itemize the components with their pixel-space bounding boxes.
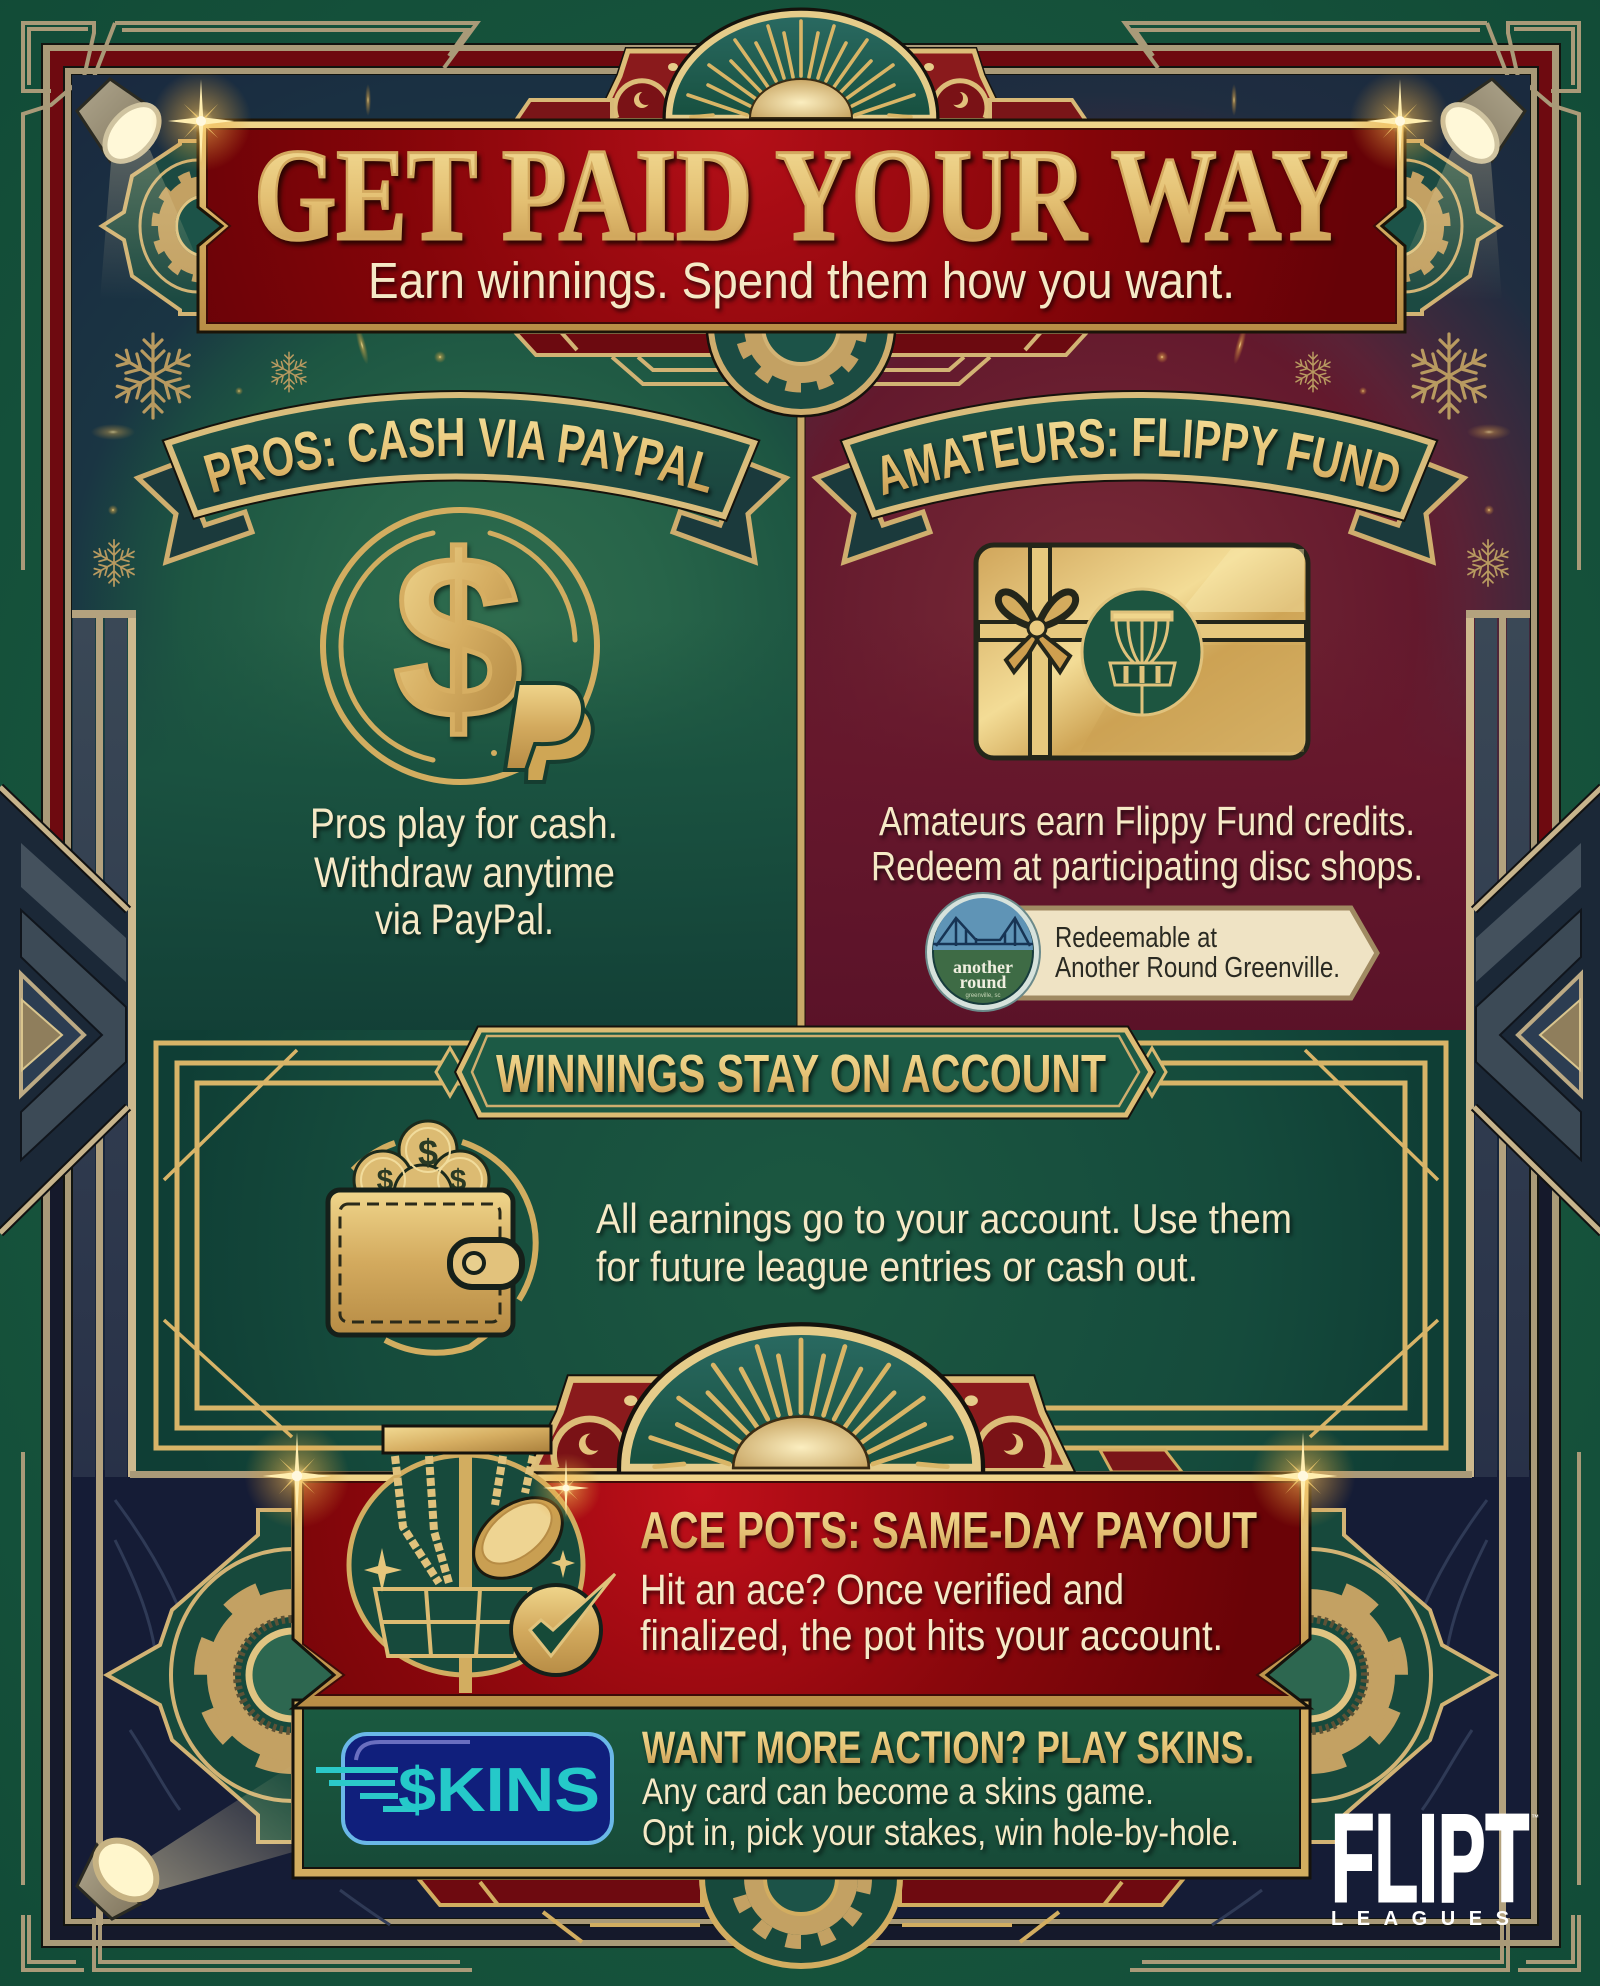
snowflake side [91,540,137,586]
panel: pros lower shading [136,620,801,1045]
panel: pros background [72,75,801,1045]
text: skins: WANT MORE ACTION? PLAY SKINS. [642,1722,1254,1773]
logo: skins: $KINS [398,1756,600,1825]
icon: ace basket [349,1426,615,1693]
spotlight beam lower [128,1760,300,1890]
title gear medallion [102,141,256,314]
panel: amateurs background [801,75,1530,1045]
top wing lines [515,100,1087,122]
sparkle ace mid [531,1453,601,1523]
text: ace pots: Hit an ace? Once verified and [640,1566,1124,1614]
text: winnings: for future league entries or cash out. [596,1243,1198,1290]
text: skins: Opt in, pick your stakes, win hole-by-hole. [642,1812,1239,1853]
text: skins: Any card can become a skins game. [642,1771,1154,1812]
side decoration right [800,0,1600,1925]
sparkle ace left [244,1424,350,1528]
icon: wallet [328,1121,536,1353]
snowflake small [269,352,309,392]
ribbon heading: amateurs: AMATEURS: FLIPPY FUND [882,418,1403,500]
center divider [797,405,805,1035]
another round badge: another [953,957,1013,977]
another round badge [926,893,1040,1011]
icon: dollar and PayPal: $ [393,508,523,767]
lower navy area [72,1470,1530,1918]
panel: amateurs lower shading [801,620,1466,1045]
top sunburst [600,12,1002,118]
text: amateurs [871,798,1423,889]
lower title chevrons [515,332,1087,384]
top half gear medallion [710,239,892,413]
ribbon heading: pros: PROS: CASH VIA PAYPAL [204,418,712,497]
text: pros [310,800,618,944]
subtitle: Earn winnings. Spend them how you want. [368,252,1235,309]
path for ribbon text [200,456,720,497]
ace gear medallion [107,1510,415,1842]
lower sunburst [534,1328,1068,1468]
logo: skins [316,1734,612,1843]
sparkle ace right [1250,1424,1356,1528]
title: GET PAID YOUR WAY [254,121,1348,268]
snowflake large [111,334,195,418]
panel: winnings background [130,1030,1472,1477]
text: ace pots [640,1502,1257,1660]
text: pros: via PayPal. [375,896,554,944]
ribbon: amateurs [816,395,1464,562]
sparkle top right [1350,71,1450,171]
ember glows [91,84,446,515]
another round badge: round [960,972,1006,992]
text: amateurs: Amateurs earn Flippy Fund credits. [879,798,1415,844]
icon: wallet: $ [377,1164,394,1197]
redeem tag [1000,908,1377,998]
sparkle top left [151,71,251,171]
icon: gift card [976,545,1308,758]
spotlight bottom [77,1829,168,1919]
lower bottom wings [418,1878,1184,1942]
side decoration left [0,0,802,1925]
icon: wallet: $ [418,1132,438,1173]
text: amateurs: Redeem at participating disc shops. [871,843,1423,889]
redeem tag: Redeemable at [1055,922,1217,954]
spotlight top [77,79,170,172]
winnings heading plate: WINNINGS STAY ON ACCOUNT [496,1044,1106,1104]
title banner [198,120,1405,332]
another round badge: greenville, sc [965,993,1001,999]
text: winnings: All earnings go to your account. Use them [596,1195,1292,1242]
text: pros: Withdraw anytime [314,849,615,897]
logo: flipt leagues: LEAGUES [1331,1908,1509,1930]
icon: wallet: $ [450,1164,467,1197]
panel: skins [293,1700,1310,1878]
text: skins [642,1722,1254,1853]
bottom half gear medallion [702,1790,900,1966]
panel: ace pots red inner [303,1482,1300,1695]
lower wing extension [1100,1450,1182,1472]
spotlight beam top [100,150,215,300]
text: ace pots: finalized, the pot hits your account. [640,1612,1223,1660]
text: ace pots: ACE POTS: SAME-DAY PAYOUT [640,1502,1257,1560]
text: pros: Pros play for cash. [310,800,618,848]
text: winnings [596,1195,1292,1290]
icon: dollar and PayPal [323,508,597,782]
frame left half [23,23,802,1970]
redeem tag: Another Round Greenville. [1055,952,1340,984]
path for ribbon text 2 [878,456,1398,497]
panel: ace pots [293,1473,1310,1708]
winnings heading plate [436,1030,1166,1115]
ribbon: pros [138,395,786,562]
frame right half [800,23,1579,1970]
winnings frame lines [156,1043,1446,1448]
logo: flipt leagues: ™ [1531,1813,1539,1822]
